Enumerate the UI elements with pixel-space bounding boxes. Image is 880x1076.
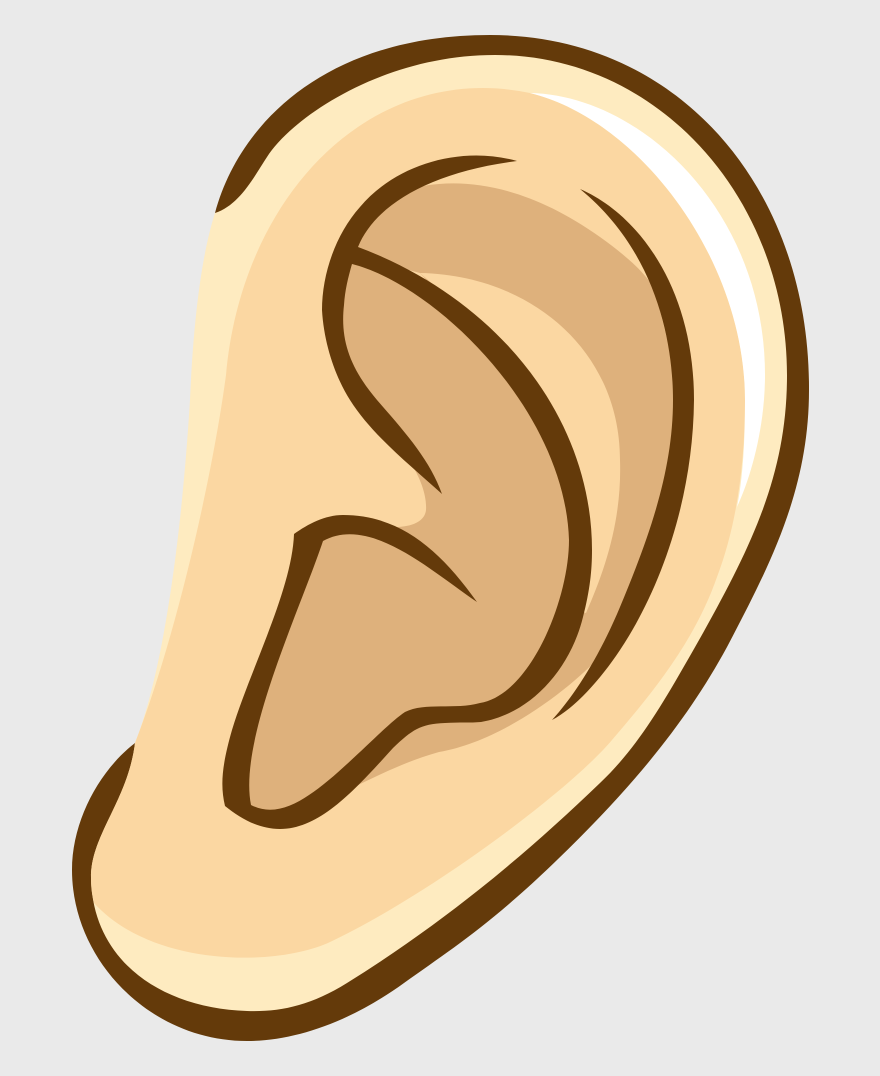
ear outer outline [72, 35, 809, 1041]
shaded upper fold [352, 183, 682, 785]
peach antihelix [420, 273, 620, 613]
ear cream rim [91, 55, 787, 1011]
white highlight [530, 93, 765, 507]
ear peach skin [91, 88, 745, 958]
shaded concha [240, 264, 580, 815]
antihelix dark line [552, 189, 694, 720]
inner ear dark line [222, 156, 592, 829]
